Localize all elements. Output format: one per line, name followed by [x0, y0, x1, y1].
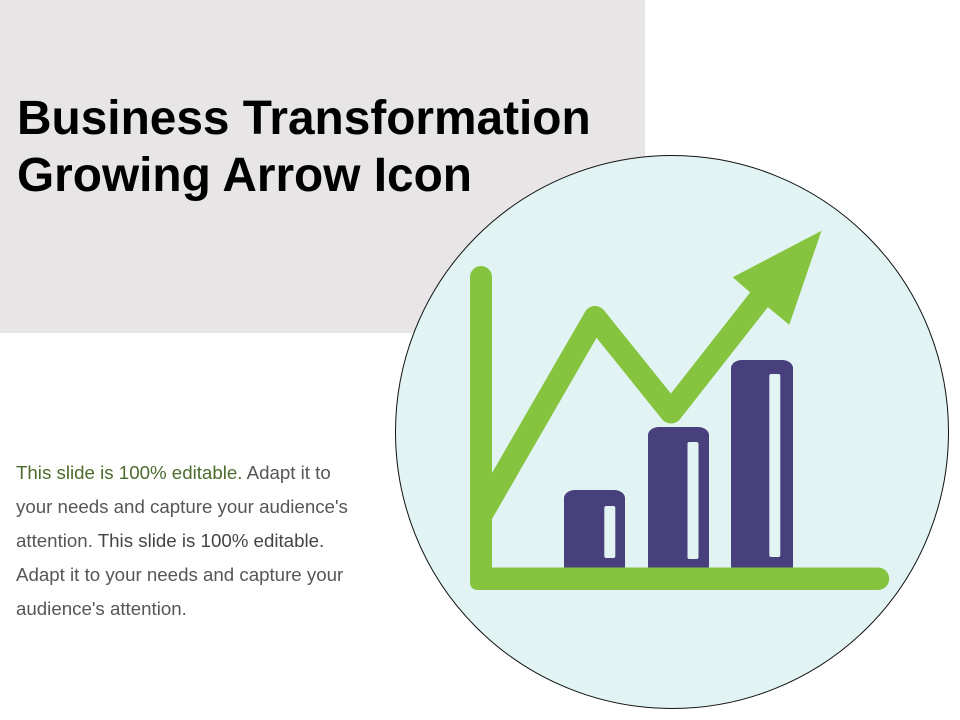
chart axes	[470, 266, 889, 590]
bar: tall	[731, 360, 793, 568]
title	[17, 92, 591, 202]
bar: small	[564, 490, 625, 568]
body text: audience's attention.	[16, 598, 187, 619]
body text: This slide is 100% editable. Adapt it to	[16, 462, 331, 483]
arrow: rising line	[481, 231, 822, 515]
title: Growing Arrow Icon	[17, 149, 472, 202]
body text: attention. This slide is 100% editable.	[16, 530, 324, 551]
header panel	[0, 0, 645, 333]
bar: medium	[648, 427, 709, 568]
circle background	[396, 156, 948, 708]
body text: Adapt it to your needs and capture your	[16, 564, 343, 585]
title: Business Transformation	[17, 92, 591, 145]
body text: your needs and capture your audience's	[16, 496, 348, 517]
body text	[16, 462, 348, 619]
